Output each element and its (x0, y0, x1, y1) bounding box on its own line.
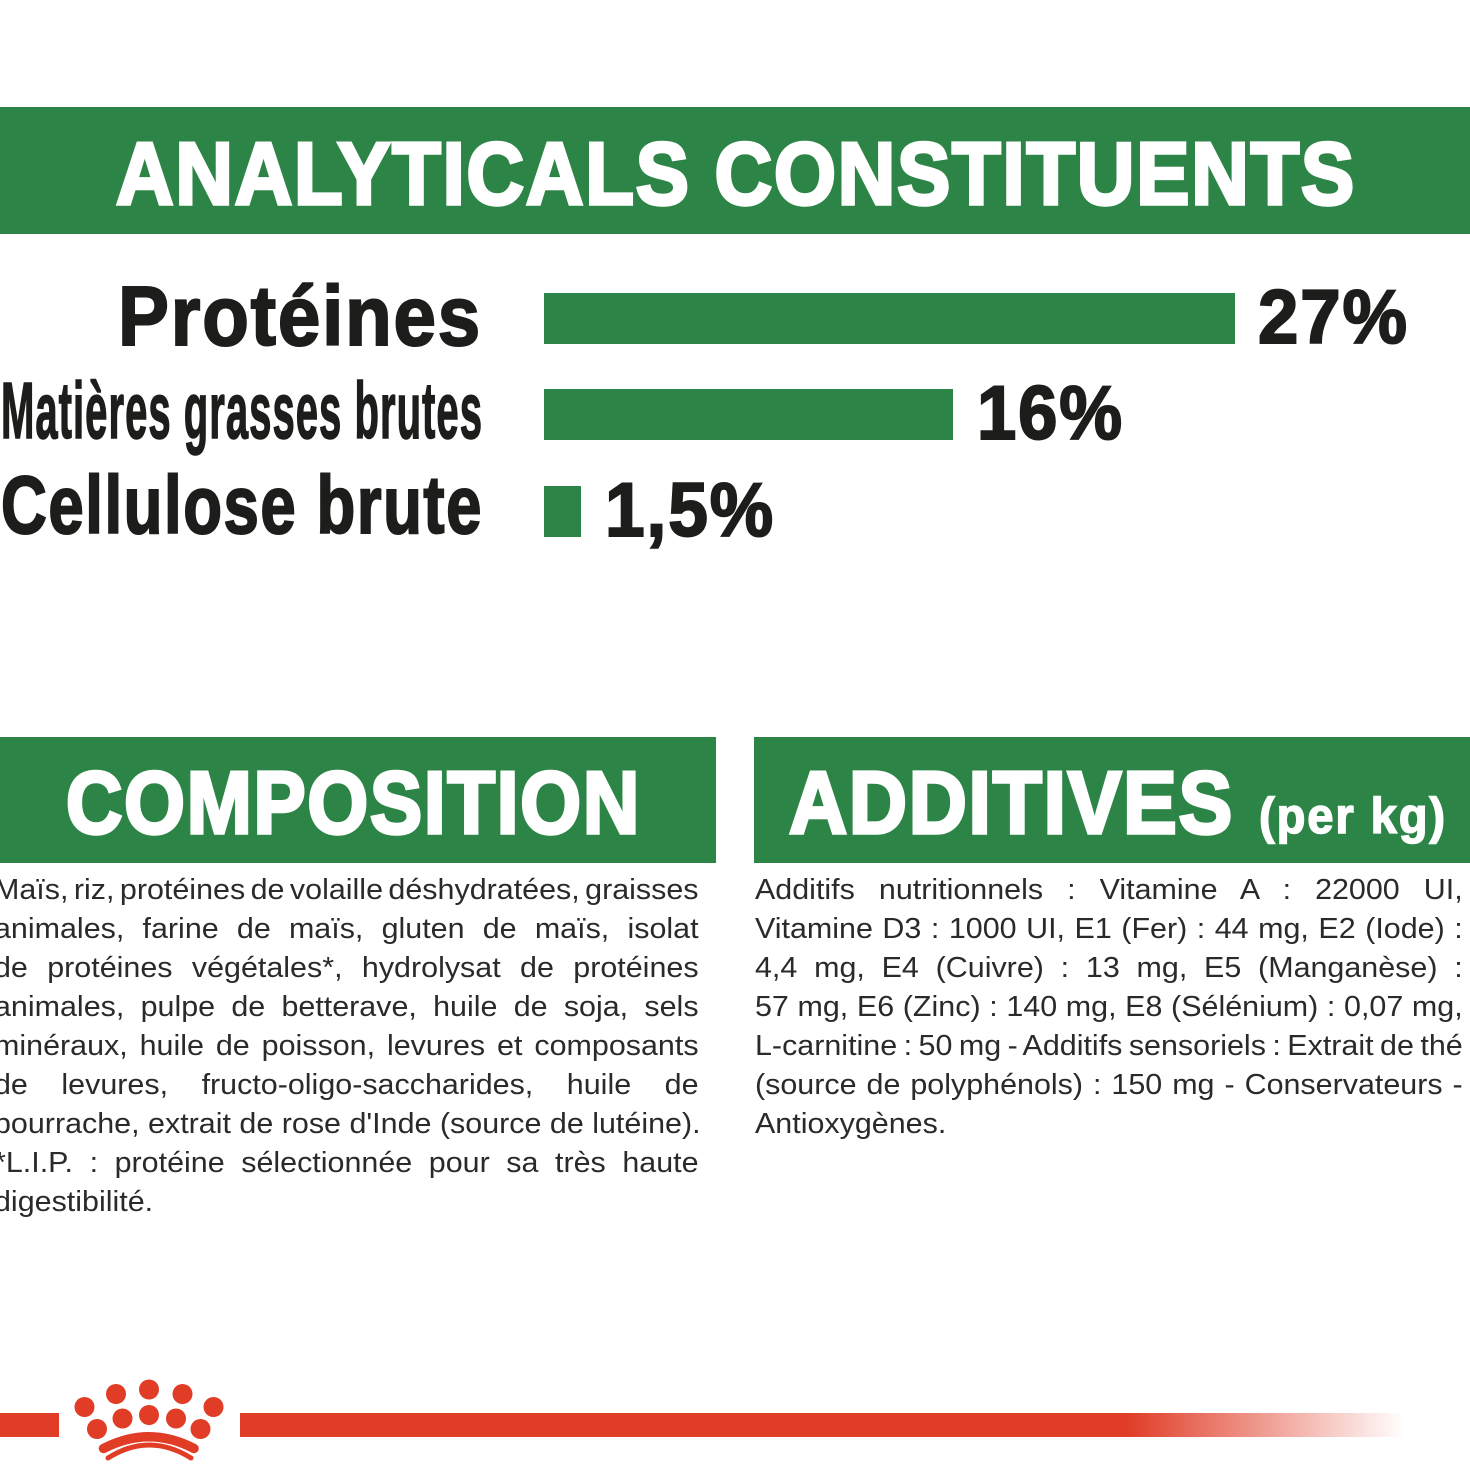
panel: composition header: COMPOSITION (66, 753, 641, 852)
text block: composition: de protéines végétales*, hydrolysat de protéines (0, 952, 699, 984)
text block: composition: de levures, fructo-oligo-saccharides, huile de (0, 1069, 699, 1101)
icon: royal crown logo (74, 1380, 224, 1458)
text block: composition: Maïs, riz, protéines de volaille déshydratées, graisses (0, 874, 699, 906)
panel: analyticals constituents header: ANALYTICALS CONSTITUENTS (116, 124, 1356, 223)
row: Cellulose brute 1,5%: 1,5% (605, 468, 775, 553)
row: Matières grasses brutes 16%: Matières grasses brutes (1, 366, 483, 455)
footer red line (0, 1413, 1405, 1437)
text block: composition: animales, pulpe de betterave, huile de soja, sels (0, 991, 699, 1023)
text block: additives: L-carnitine : 50 mg - Additifs sensoriels : Extrait de thé (755, 1030, 1463, 1062)
text block: composition: bourrache, extrait de rose d'Inde (source de lutéine). (0, 1108, 701, 1140)
row: Matières grasses brutes 16%: 16% (977, 371, 1124, 456)
row: Protéines 27%: Protéines (118, 269, 482, 363)
text block: additives: 4,4 mg, E4 (Cuivre) : 13 mg, E5 (Manganèse) : (755, 952, 1463, 984)
row: Protéines 27%: 27% (1258, 275, 1409, 360)
panel: additives header (754, 737, 1470, 863)
text block: additives: Additifs nutritionnels : Vitamine A : 22000 UI, (755, 874, 1463, 906)
text block: composition: animales, farine de maïs, gluten de maïs, isolat (0, 913, 699, 945)
row: Cellulose brute 1,5%: Cellulose brute (1, 460, 483, 551)
panel: additives header: ADDITIVES (789, 753, 1234, 852)
text block: additives: (source de polyphénols) : 150 mg - Conservateurs - (755, 1069, 1463, 1101)
panel: additives header: (per kg) (1259, 788, 1447, 844)
text block: additives (755, 874, 1463, 1140)
text block: additives: Vitamine D3 : 1000 UI, E1 (Fer) : 44 mg, E2 (Iode) : (755, 913, 1463, 945)
row: Protéines 27% (118, 269, 1409, 363)
text block: composition (0, 874, 701, 1218)
text block: additives: Antioxygènes. (755, 1108, 946, 1140)
text block: composition: minéraux, huile de poisson, levures et composants (0, 1030, 699, 1062)
text block: additives: 57 mg, E6 (Zinc) : 140 mg, E8 (Sélénium) : 0,07 mg, (755, 991, 1463, 1023)
text block: composition: *L.I.P. : protéine sélectionnée pour sa très haute (0, 1147, 699, 1179)
